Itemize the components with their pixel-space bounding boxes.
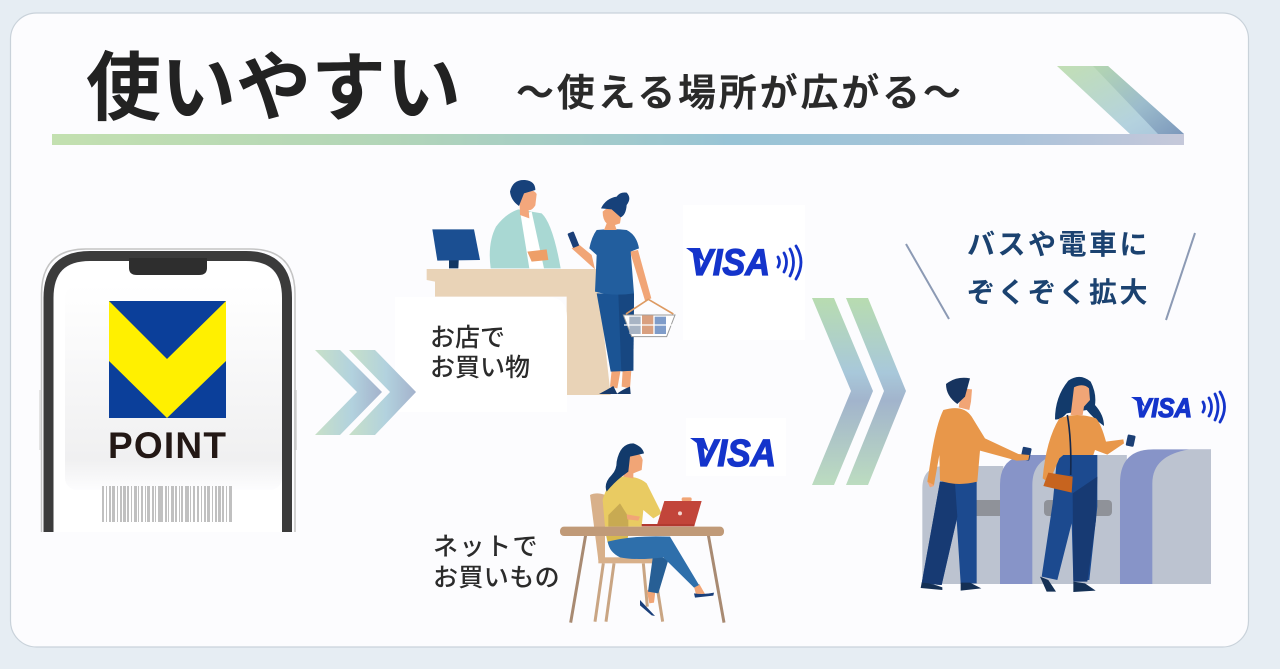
Visa contactless logo: VISA xyxy=(690,242,770,283)
woman passenger xyxy=(1040,377,1136,592)
laptop xyxy=(642,501,702,526)
callout: expanding to buses and trains: バスや電車に xyxy=(967,229,1150,260)
seated woman xyxy=(603,443,714,616)
arrow: small double chevron xyxy=(315,350,416,435)
counter xyxy=(427,269,611,395)
barcode xyxy=(102,486,232,522)
Visa logo: VISA xyxy=(694,433,776,475)
arrow: large double chevron xyxy=(812,298,906,485)
V logo xyxy=(109,301,226,418)
shopper xyxy=(567,192,651,394)
POINT label: POINT xyxy=(108,425,226,466)
chair xyxy=(590,493,663,622)
Visa contactless logo on gate xyxy=(1131,392,1224,423)
man passenger xyxy=(921,378,1032,591)
title: 使いやすい xyxy=(86,46,461,130)
phone notch xyxy=(129,258,207,275)
smartphone with V POINT card xyxy=(39,249,297,532)
callout: expanding to buses and trains xyxy=(906,229,1195,320)
panel: shop label xyxy=(395,297,567,412)
subtitle: ～使える場所が広がる～ xyxy=(516,73,964,115)
desk xyxy=(560,527,724,623)
cashier xyxy=(490,180,561,268)
monitor xyxy=(432,229,480,268)
gate bodies xyxy=(922,449,1211,584)
text: online shopping: ネットで xyxy=(433,533,539,561)
callout: expanding to buses and trains: ぞくぞく拡大 xyxy=(967,277,1150,308)
text: shop shopping: お買い物 xyxy=(430,354,530,382)
shopping basket xyxy=(623,299,675,337)
illustration: ticket gate xyxy=(921,377,1211,592)
Visa contactless logo xyxy=(683,205,805,340)
Visa contactless logo on gate: VISA xyxy=(1135,393,1192,423)
illustration: shop counter xyxy=(427,180,675,395)
text: online shopping: お買いもの xyxy=(433,564,560,592)
heading underline arrow xyxy=(52,66,1184,145)
text: shop shopping: お店で xyxy=(430,324,505,352)
illustration: online shopper xyxy=(560,443,724,623)
Visa logo xyxy=(686,418,786,476)
